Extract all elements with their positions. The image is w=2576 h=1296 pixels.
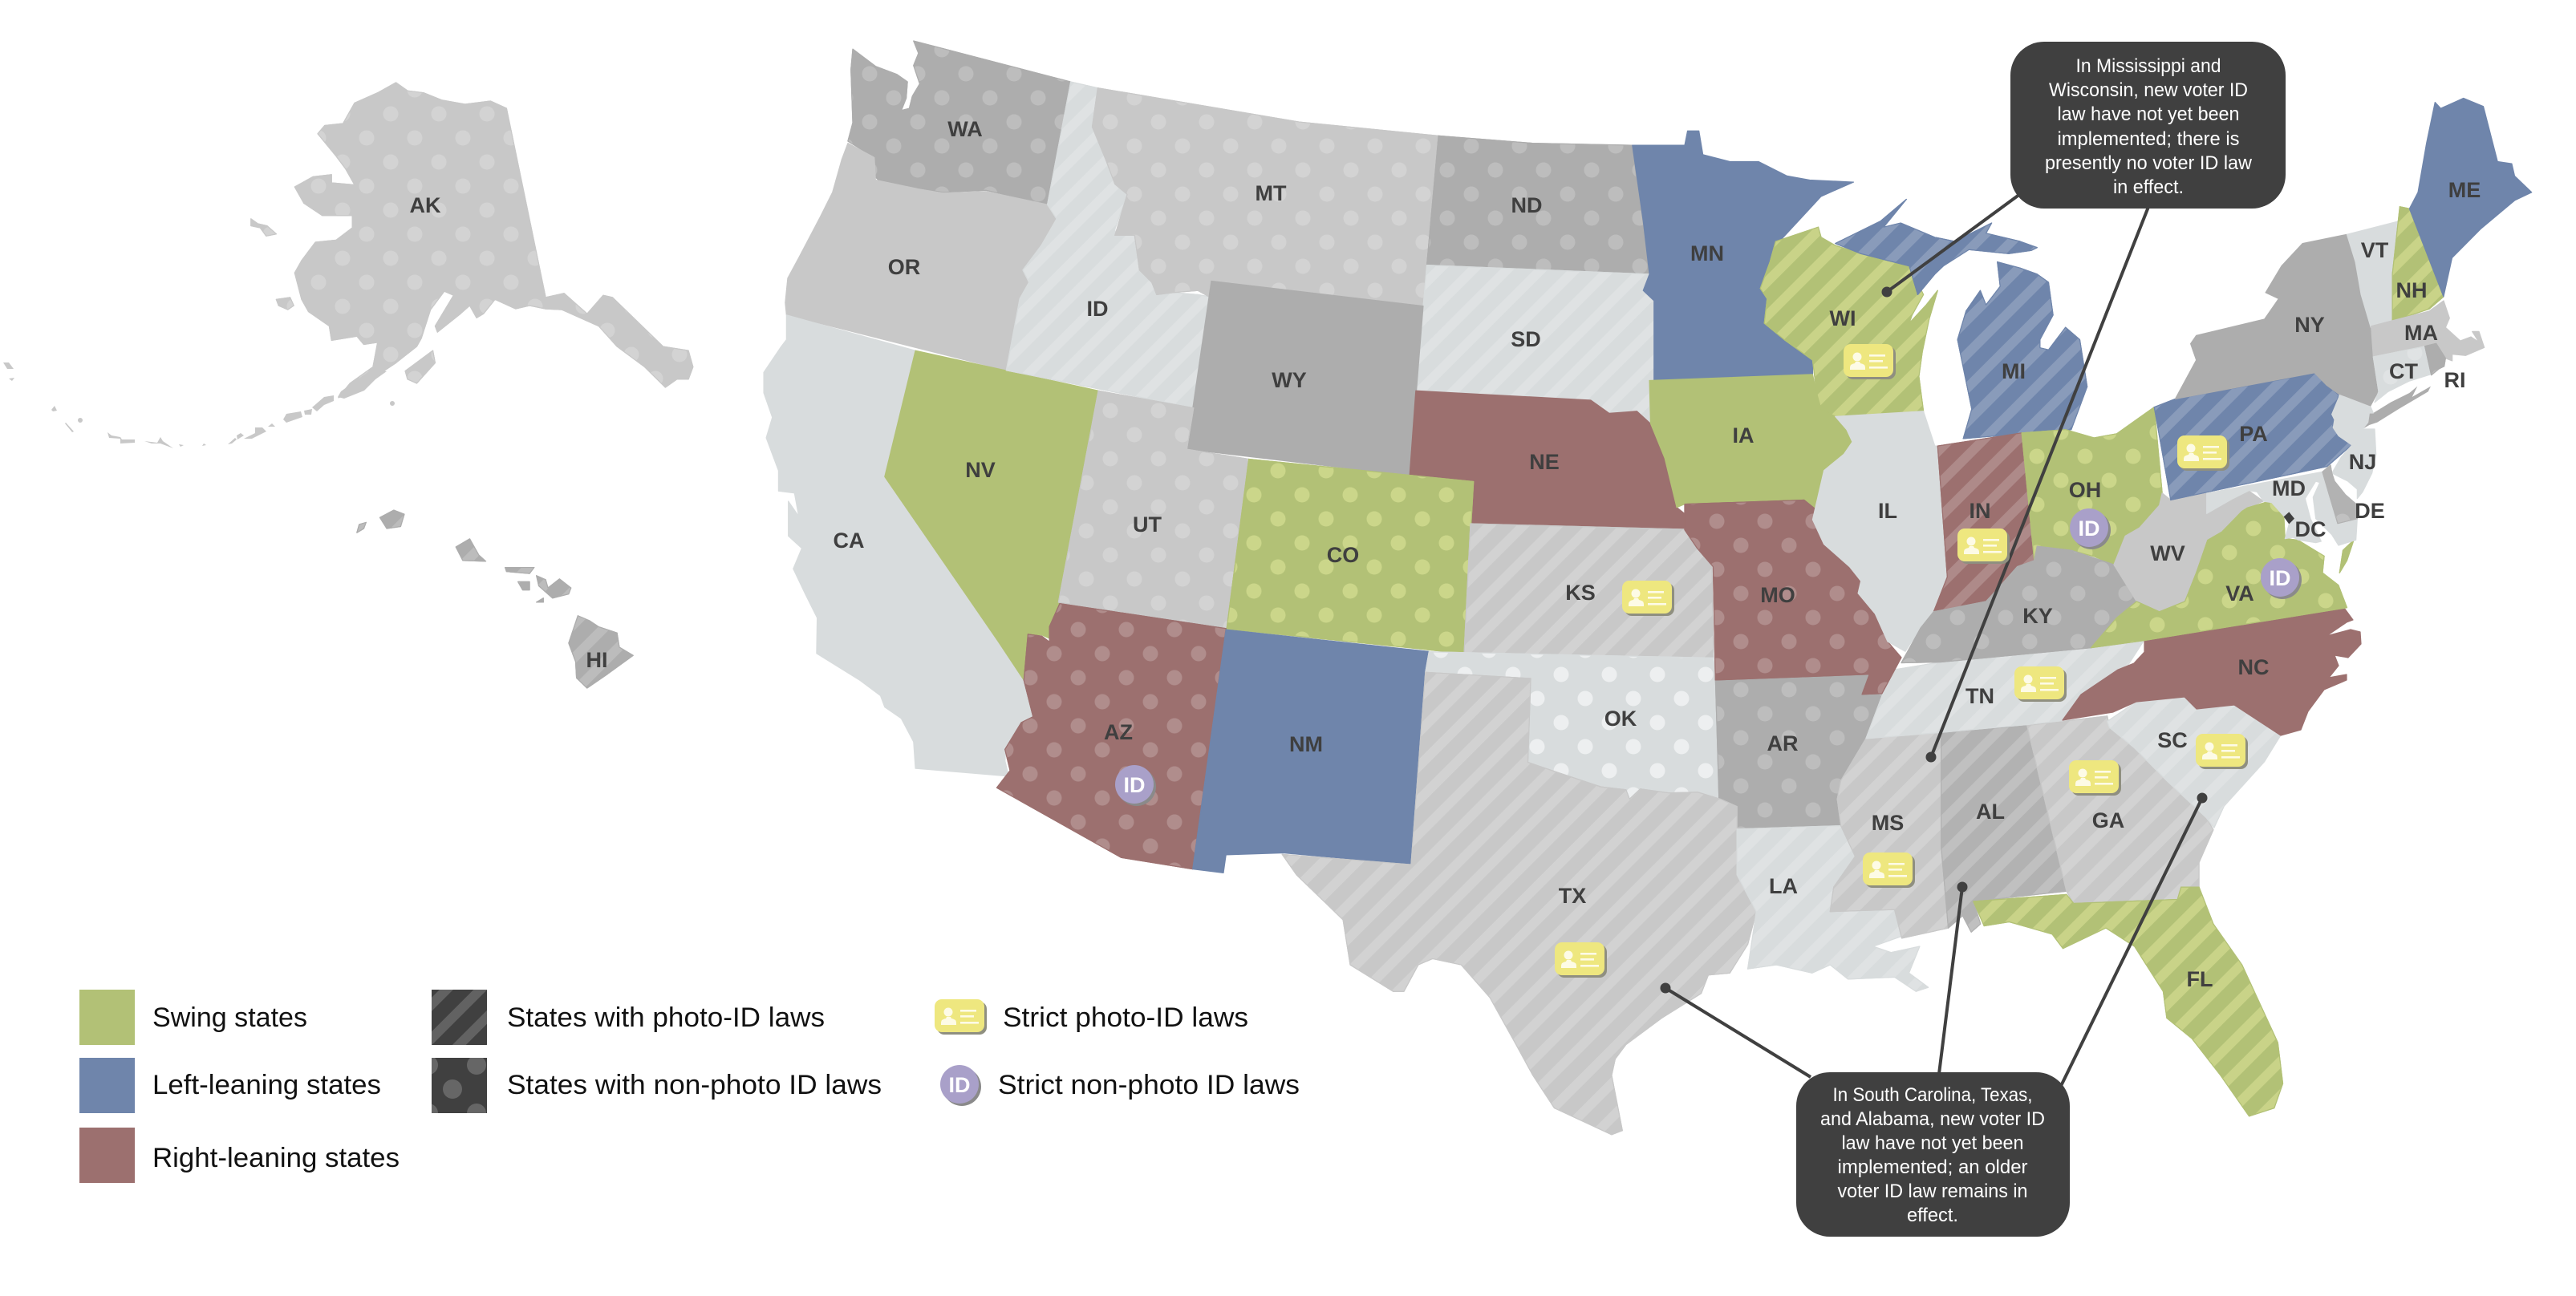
label: WI: WI	[1829, 306, 1856, 330]
label: MA: MA	[2404, 321, 2438, 345]
legend icon: strict photo-ID laws	[935, 999, 987, 1035]
legend icon: strict non-photo ID laws	[940, 1065, 981, 1106]
legend text: strict non-photo ID laws: Strict non-photo ID laws	[998, 1070, 1300, 1100]
label: IL: IL	[1878, 499, 1897, 523]
label: WY: WY	[1272, 368, 1307, 392]
state: New Jersey	[2332, 395, 2376, 499]
label: WV: WV	[2150, 541, 2185, 565]
label: WA: WA	[947, 117, 983, 141]
label: NV: NV	[965, 458, 996, 482]
label: NH: NH	[2395, 278, 2428, 302]
state: California	[764, 315, 1033, 776]
callout: South Carolina, Texas and Alabama: In South Carolina, Texas,	[1832, 1084, 2033, 1106]
label: CA: CA	[833, 529, 865, 553]
label: GA: GA	[2092, 808, 2124, 832]
label: VA: VA	[2225, 581, 2254, 605]
legend text: states with non-photo ID laws: States with non-photo ID laws	[507, 1070, 882, 1100]
state: New York	[2175, 234, 2378, 407]
label: AK: AK	[409, 193, 441, 217]
state: New York, Long Island	[2363, 387, 2431, 429]
label: SC: SC	[2157, 728, 2188, 752]
callout: Mississippi and Wisconsin	[2010, 42, 2286, 209]
state: Nebraska	[1410, 391, 1704, 529]
label: FL: FL	[2187, 967, 2213, 991]
label: OR: OR	[888, 255, 920, 279]
midwestern and northeastern states	[1633, 98, 2532, 695]
state: South Carolina	[2107, 697, 2281, 828]
state: Connecticut	[2373, 346, 2431, 403]
state: Idaho	[1006, 82, 1209, 408]
callout: South Carolina, Texas and Alabama	[1796, 1072, 2070, 1237]
callout: Mississippi and Wisconsin: In Mississippi and	[2076, 55, 2221, 77]
icon: strict photo-ID Tennessee	[2014, 666, 2067, 702]
label: NC: NC	[2238, 655, 2269, 679]
state: Arkansas	[1715, 674, 1882, 829]
label: KS: KS	[1565, 581, 1596, 605]
state: Louisiana	[1737, 826, 1929, 991]
state: Montana	[1092, 88, 1438, 306]
state: Nevada	[885, 350, 1098, 680]
legend swatch: right-leaning states	[79, 1128, 135, 1183]
label: NY: NY	[2294, 313, 2325, 337]
state: Kentucky	[1901, 546, 2136, 663]
state: Texas	[1282, 672, 1756, 1135]
state: Mississippi	[1830, 732, 1949, 938]
icon: strict photo-ID Georgia	[2069, 760, 2121, 796]
icon: strict non-photo ID Ohio	[2070, 508, 2111, 549]
leader: Texas	[1661, 983, 1811, 1077]
icon: strict photo-ID Kansas	[1622, 581, 1674, 616]
state: Arizona	[996, 604, 1226, 869]
label: CO: CO	[1327, 543, 1359, 567]
state labels	[409, 117, 2481, 991]
state: Illinois	[1812, 411, 1947, 651]
label: ID: ID	[1086, 297, 1109, 321]
legend text: swing states: Swing states	[152, 1002, 307, 1033]
label: CT: CT	[2389, 359, 2418, 383]
state: Wyoming	[1187, 281, 1423, 476]
state: Florida	[1974, 887, 2283, 1116]
state: Washington	[848, 41, 1071, 205]
state: New Mexico	[1193, 630, 1429, 873]
label: AZ: AZ	[1104, 720, 1133, 744]
state: Alaska and Hawaii inset	[251, 83, 693, 688]
callout: Mississippi and Wisconsin: presently no voter ID law	[2045, 152, 2253, 174]
callout: Mississippi and Wisconsin: implemented; there is	[2057, 128, 2240, 150]
label: MS: MS	[1872, 811, 1904, 835]
label: IA: IA	[1733, 423, 1754, 448]
legend icon: strict non-photo ID laws: ID	[948, 1073, 971, 1097]
callout: South Carolina, Texas and Alabama: and Alabama, new voter ID	[1820, 1108, 2045, 1130]
icon: strict photo-ID Pennsylvania	[2177, 435, 2229, 471]
label: TN: TN	[1965, 684, 1994, 708]
label: TX: TX	[1559, 884, 1586, 908]
state: North Dakota	[1427, 136, 1649, 274]
label: VT: VT	[2361, 238, 2389, 262]
label: MD: MD	[2272, 476, 2306, 500]
state: West Virginia	[2114, 491, 2263, 612]
southern states	[1282, 642, 2283, 1135]
label: HI: HI	[586, 648, 608, 672]
callout: Mississippi and Wisconsin: law have not yet been	[2057, 103, 2240, 125]
icon: strict non-photo ID Virginia: ID	[2269, 566, 2291, 590]
label: RI: RI	[2444, 368, 2466, 392]
label: AL: AL	[1976, 800, 2005, 824]
label: PA: PA	[2239, 422, 2268, 446]
label: OK: OK	[1604, 707, 1637, 731]
callout: South Carolina, Texas and Alabama: voter ID law remains in	[1837, 1181, 2028, 1202]
label: ME: ME	[2448, 178, 2481, 202]
label: MT: MT	[1256, 181, 1287, 205]
state: Oregon	[785, 144, 1057, 371]
mid-Atlantic and New England states	[2207, 301, 2485, 545]
legend text: left-leaning states: Left-leaning states	[152, 1070, 381, 1100]
state: Iowa	[1649, 375, 1852, 512]
icon: strict photo-ID Texas	[1555, 942, 1607, 978]
state: Oklahoma	[1426, 652, 1721, 799]
state: Wisconsin	[1760, 227, 1937, 416]
icon: strict photo-ID Indiana	[1957, 529, 2010, 564]
callout: South Carolina, Texas and Alabama: effect.	[1907, 1205, 1958, 1226]
icon: strict non-photo ID Arizona: ID	[1123, 773, 1146, 797]
callout: Mississippi and Wisconsin: in effect.	[2113, 176, 2184, 198]
southwestern states	[996, 604, 1429, 873]
state: Pennsylvania	[2154, 373, 2351, 500]
state: Ohio	[2022, 407, 2162, 565]
label: MN: MN	[1690, 241, 1724, 265]
label: AR: AR	[1767, 731, 1799, 755]
western states	[764, 41, 1704, 776]
state: District of Columbia	[2284, 512, 2294, 524]
label: MI: MI	[2002, 359, 2026, 383]
label: SD: SD	[1511, 327, 1541, 351]
label: NJ: NJ	[2349, 450, 2376, 474]
label: ND: ND	[1511, 193, 1542, 217]
label: LA: LA	[1769, 874, 1798, 898]
state: Alaska Peninsula and Aleutian Islands	[3, 362, 395, 448]
label: DE: DE	[2355, 499, 2385, 523]
icon: strict non-photo ID Virginia	[2261, 558, 2302, 599]
state: Alaska	[251, 83, 693, 398]
icon: strict photo-ID South Carolina	[2196, 734, 2248, 769]
label: IN: IN	[1969, 499, 1991, 523]
legend swatch: swing states	[79, 990, 135, 1045]
legend text: states with photo-ID laws: States with photo-ID laws	[507, 1002, 825, 1033]
state: Georgia	[2027, 716, 2213, 904]
label: UT: UT	[1133, 512, 1162, 537]
callout: Mississippi and Wisconsin: Wisconsin, new voter ID	[2049, 79, 2248, 101]
leader lines to the callouts	[1661, 194, 2208, 1086]
icon: strict non-photo ID Ohio: ID	[2078, 516, 2100, 541]
legend swatch: states with non-photo ID laws	[432, 1058, 487, 1113]
legend text: right-leaning states: Right-leaning states	[152, 1143, 400, 1173]
state: Rhode Island	[2425, 343, 2445, 375]
state: Alabama	[1941, 726, 2067, 932]
label: DC: DC	[2294, 517, 2327, 541]
state: Delaware	[2322, 465, 2357, 524]
state: Kansas	[1464, 524, 1714, 659]
state: Indiana	[1933, 433, 2034, 612]
state: Colorado	[1227, 459, 1474, 654]
state: Michigan	[1836, 199, 2087, 439]
state: Utah	[1058, 391, 1249, 629]
leader: Mississippi	[1925, 207, 2148, 762]
icon: strict photo-ID Mississippi	[1863, 853, 1915, 888]
label: MO: MO	[1760, 583, 1795, 607]
state: Vermont	[2347, 221, 2400, 327]
leader: South Carolina	[2061, 792, 2208, 1086]
label: NM: NM	[1289, 732, 1323, 756]
state: South Dakota	[1416, 265, 1654, 423]
state: Virginia	[2091, 503, 2354, 648]
label: NE: NE	[1529, 450, 1560, 474]
legend text: strict photo-ID laws: Strict photo-ID laws	[1003, 1002, 1248, 1033]
callout: South Carolina, Texas and Alabama: law have not yet been	[1842, 1132, 2023, 1154]
legend	[79, 990, 1300, 1183]
state: Maine	[2409, 98, 2532, 297]
state: Minnesota	[1633, 131, 1853, 380]
label: KY: KY	[2022, 604, 2053, 628]
leader: Alabama	[1939, 882, 1967, 1074]
legend swatch: left-leaning states	[79, 1058, 135, 1113]
icon: strict photo-ID Wisconsin	[1844, 344, 1896, 379]
label: OH: OH	[2069, 478, 2101, 502]
state: North Carolina	[2063, 608, 2361, 735]
callout: South Carolina, Texas and Alabama: implemented; an older	[1837, 1156, 2028, 1178]
state: Missouri	[1685, 500, 1901, 695]
legend swatch: states with photo-ID laws	[432, 990, 487, 1045]
state: Hawaii	[357, 510, 633, 688]
state: Tennessee	[1866, 642, 2143, 739]
leader: Wisconsin	[1882, 194, 2020, 297]
icon: strict non-photo ID Arizona	[1115, 765, 1156, 806]
state: New Hampshire	[2392, 207, 2444, 322]
state: Maryland	[2207, 472, 2357, 545]
state: Massachusetts	[2371, 301, 2485, 361]
